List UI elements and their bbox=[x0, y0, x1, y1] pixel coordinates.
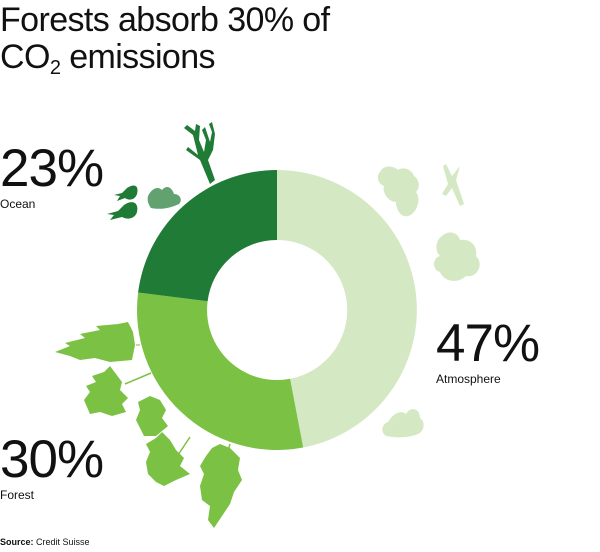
label: atmosphere: Atmosphere bbox=[436, 372, 501, 386]
title bbox=[0, 1, 330, 79]
icon: seaweed and fish bbox=[107, 122, 215, 220]
segment: forest bbox=[137, 292, 303, 450]
label: atmosphere: 47% bbox=[436, 314, 539, 373]
title: CO2 emissions bbox=[0, 38, 215, 79]
icon: clouds and plane bbox=[378, 164, 480, 437]
label: ocean: 23% bbox=[0, 139, 103, 198]
label: forest: Forest bbox=[0, 488, 34, 502]
title: Forests absorb 30% of bbox=[0, 1, 329, 39]
segment: atmosphere bbox=[277, 170, 417, 448]
icon: trees bbox=[55, 322, 242, 528]
segment: ocean bbox=[138, 170, 277, 301]
source: Source: Credit Suisse bbox=[0, 537, 90, 547]
label: forest: 30% bbox=[0, 430, 103, 489]
label: ocean: Ocean bbox=[0, 197, 35, 211]
